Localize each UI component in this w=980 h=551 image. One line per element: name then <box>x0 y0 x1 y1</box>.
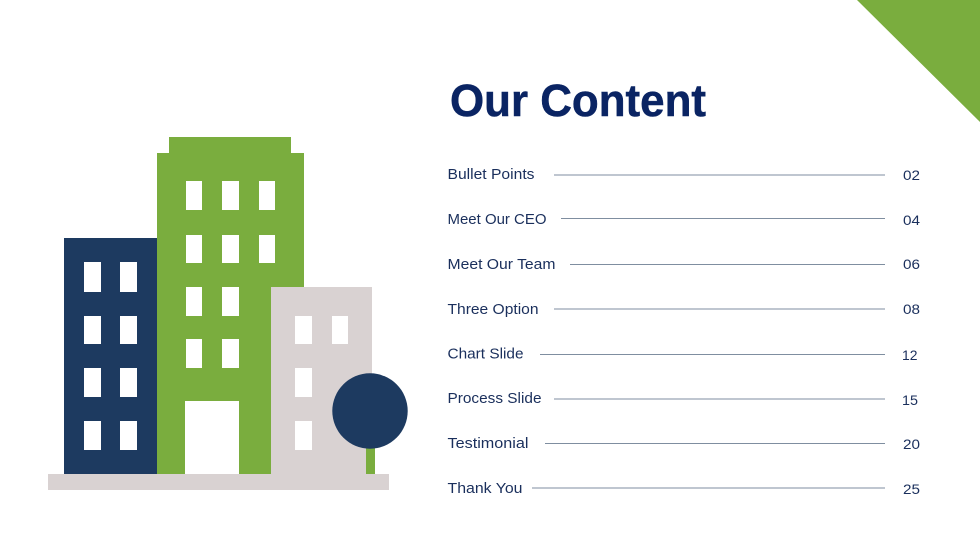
row: Bullet Points: Bullet Points <box>448 166 534 183</box>
row: Thank You: 25 <box>903 481 920 497</box>
row: Three Option <box>448 301 920 318</box>
row: Meet Our CEO: 04 <box>903 212 920 228</box>
row: Testimonial: Testimonial <box>448 435 528 452</box>
row: Thank You <box>448 480 920 497</box>
tree <box>332 373 408 475</box>
building: grey <box>271 287 372 474</box>
title: Our Content <box>450 75 706 126</box>
row: Meet Our CEO: Meet Our CEO <box>448 211 546 228</box>
row: Testimonial <box>448 435 920 452</box>
row: Chart Slide: Chart Slide <box>448 346 524 362</box>
illustration: city buildings <box>48 137 408 490</box>
contents list <box>448 166 920 497</box>
row: Meet Our Team: Meet Our Team <box>448 256 556 273</box>
row: Chart Slide: 12 <box>902 347 918 363</box>
row: Meet Our Team <box>448 256 920 273</box>
row: Process Slide <box>448 390 918 408</box>
row: Process Slide: Process Slide <box>448 390 542 407</box>
row: Bullet Points <box>448 166 920 183</box>
row: Chart Slide <box>448 346 918 363</box>
row: Bullet Points: 02 <box>903 167 920 183</box>
row: Thank You: Thank You <box>448 480 522 497</box>
building: navy <box>64 238 157 474</box>
row: Three Option: 08 <box>903 301 920 317</box>
row: Meet Our CEO <box>448 211 920 228</box>
ground <box>48 474 389 490</box>
corner triangle <box>857 0 980 122</box>
row: Meet Our Team: 06 <box>903 256 920 272</box>
building: green <box>157 137 304 474</box>
row: Process Slide: 15 <box>902 392 918 408</box>
row: Testimonial: 20 <box>903 436 920 452</box>
row: Three Option: Three Option <box>448 301 538 318</box>
